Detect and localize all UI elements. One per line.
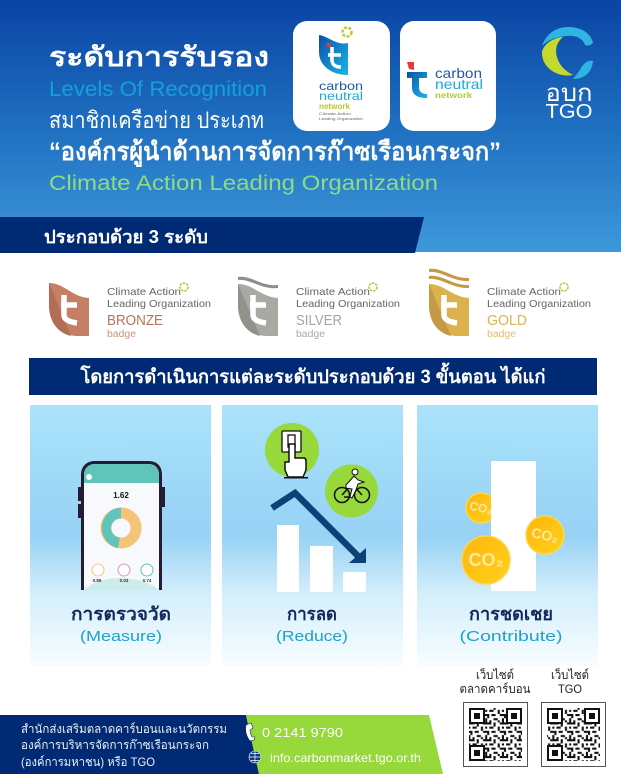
- footer: contact: 0 2141 9790: [262, 725, 343, 740]
- qr code: TGO: [542, 702, 606, 766]
- icon: phone app: 0.85: [93, 578, 102, 583]
- icon: co2 coin large: [462, 536, 510, 584]
- title: levels of recognition: Levels Of Recognition: [49, 78, 267, 101]
- icon: phone app: 0.03: [120, 578, 129, 583]
- title: levels of recognition: ระดับการรับรอง: [49, 42, 269, 72]
- panel: measure: การตรวจวัด: [71, 604, 171, 624]
- panel: contribute: การชดเชย: [469, 604, 553, 624]
- badge: bronze: badge: [107, 329, 136, 340]
- logo: TGO: [542, 27, 593, 123]
- logo card: carbon neutral network vertical: network: [319, 102, 351, 111]
- qr label: carbon market website: [460, 667, 530, 696]
- logo card: carbon neutral network horizontal: network: [435, 90, 472, 100]
- qr label: TGO website: เว็บไซต์: [551, 667, 589, 682]
- logo: TGO: TGO: [546, 101, 592, 123]
- logo card: carbon neutral network vertical: neutral: [319, 89, 363, 103]
- bar chart: decreasing: [277, 525, 366, 592]
- icon: phone app: 1.62: [113, 491, 129, 500]
- title: levels of recognition: “องค์กรผู้นำด้านการจัดการก๊าซเรือนกระจก”: [49, 137, 501, 168]
- panel: reduce: [222, 405, 403, 666]
- badge: bronze: BRONZE: [107, 312, 163, 329]
- panel: reduce: (Reduce): [276, 628, 348, 645]
- badge: gold: GOLD: [487, 312, 527, 329]
- banner: three steps: [29, 358, 597, 395]
- badge: silver: [238, 277, 400, 340]
- icon: phone: [246, 723, 255, 741]
- banner: three levels: ประกอบด้วย 3 ระดับ: [44, 227, 208, 247]
- footer: contact: องค์การบริหารจัดการก๊าซเรือนกระจก: [21, 738, 209, 752]
- logo card: carbon neutral network horizontal: [400, 21, 496, 131]
- white bar: [491, 461, 536, 591]
- panel: contribute: [417, 405, 598, 666]
- footer: contact: (องค์การมหาชน) หรือ TGO: [21, 755, 155, 769]
- badge: gold: [429, 269, 591, 340]
- icon: phone app: 0.74: [143, 578, 152, 583]
- logo: TGO: อบก: [546, 80, 592, 107]
- qr label: TGO website: [551, 667, 589, 696]
- banner: three steps: โดยการดำเนินการแต่ละระดับประกอบด้วย 3 ขั้นตอน ได้แก่: [80, 362, 546, 388]
- header background: [0, 0, 621, 252]
- badge: gold: badge: [487, 329, 516, 340]
- qr label: TGO website: TGO: [558, 682, 582, 696]
- badge: silver: Leading Organization: [296, 298, 400, 310]
- title: levels of recognition: Climate Action Leading Organization: [49, 172, 438, 195]
- badge: bronze: Climate Action: [107, 286, 181, 298]
- panel: measure: (Measure): [80, 628, 162, 645]
- qr label: carbon market website: ตลาดคาร์บอน: [460, 682, 530, 696]
- logo card: carbon neutral network vertical: Leading Organization: [319, 116, 363, 121]
- title: levels of recognition: [49, 42, 501, 195]
- logo card: carbon neutral network vertical: carbon: [319, 79, 363, 93]
- qr code: carbon market: [464, 702, 528, 766]
- panel: reduce: การลด: [287, 604, 337, 624]
- arrow: downward: [272, 493, 366, 563]
- icon: co2 coin right: CO₂: [530, 524, 560, 546]
- badge: silver: badge: [296, 329, 325, 340]
- logo card: carbon neutral network horizontal: neutral: [435, 76, 483, 92]
- banner: three levels: [0, 217, 424, 253]
- badge: bronze: Leading Organization: [107, 298, 211, 310]
- icon: co2 coin small: [466, 493, 496, 523]
- icon: co2 coin small: CO₂: [468, 499, 494, 517]
- footer: contact: [0, 715, 443, 774]
- panel: measure: [30, 405, 211, 666]
- icon: globe: [249, 751, 261, 763]
- footer: contact: สำนักส่งเสริมตลาดคาร์บอนและนวัตกรรม: [21, 722, 227, 736]
- footer: contact: info.carbonmarket.tgo.or.th: [270, 751, 421, 765]
- panel: contribute: (Contribute): [460, 628, 562, 645]
- title: levels of recognition: สมาชิกเครือข่าย ประเภท: [49, 107, 264, 133]
- icon: co2 coin large: CO₂: [468, 550, 504, 570]
- icon: cyclist: [325, 464, 378, 518]
- logo card: carbon neutral network horizontal: carbon: [435, 65, 482, 81]
- logo card: carbon neutral network vertical: Climate Action: [319, 111, 351, 116]
- logo card: carbon neutral network vertical: [293, 21, 390, 131]
- badge: silver: Climate Action: [296, 286, 370, 298]
- badge: gold: Leading Organization: [487, 298, 591, 310]
- badge: bronze: [49, 283, 211, 340]
- icon: phone app: [78, 461, 165, 590]
- badge: silver: SILVER: [296, 312, 342, 329]
- qr label: carbon market website: เว็บไซต์: [476, 667, 514, 682]
- icon: co2 coin right: [526, 516, 564, 554]
- icon: light switch: [265, 423, 319, 478]
- badge: gold: Climate Action: [487, 286, 561, 298]
